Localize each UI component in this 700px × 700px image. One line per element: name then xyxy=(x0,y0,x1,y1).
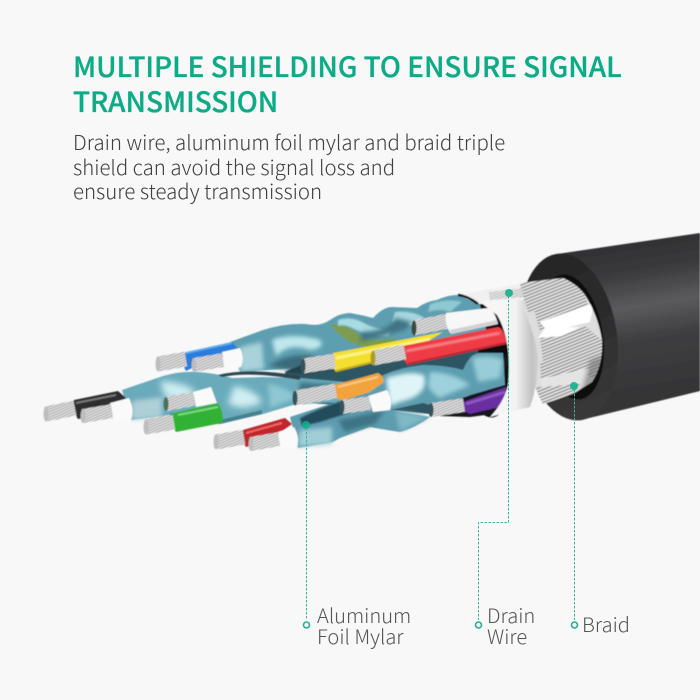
white wire xyxy=(412,308,498,336)
callout: aluminum foil mylar xyxy=(302,421,411,650)
green wire pair xyxy=(144,387,223,434)
blue wire pair xyxy=(156,342,243,372)
callout: drain wire: Drain xyxy=(487,600,535,629)
foil band xyxy=(480,300,538,417)
title: TRANSMISSION xyxy=(73,81,278,121)
description text: Drain wire, aluminum foil mylar and braid triple xyxy=(73,126,505,156)
callout: braid: Braid xyxy=(582,609,630,638)
drain wire and sleeve xyxy=(458,284,524,304)
description text: ensure steady transmission xyxy=(73,175,322,205)
description text xyxy=(73,126,505,205)
cable illustration xyxy=(44,233,700,451)
red wire xyxy=(370,327,507,366)
upper twisted foil pair xyxy=(230,295,490,374)
outer black jacket xyxy=(509,233,700,427)
black wire pair xyxy=(44,391,133,423)
white wire lower xyxy=(340,390,391,414)
title xyxy=(73,46,622,121)
purple wire xyxy=(428,387,508,417)
orange wire xyxy=(292,373,384,406)
callout: aluminum foil mylar: Aluminum xyxy=(317,600,411,629)
yellow wire xyxy=(300,332,443,374)
title: MULTIPLE SHIELDING TO ENSURE SIGNAL xyxy=(73,46,622,86)
inner fill behind foil pairs xyxy=(285,318,490,415)
lower foil pair xyxy=(290,353,508,448)
braid shield xyxy=(520,277,603,404)
callout: drain wire xyxy=(476,289,535,650)
callout: braid xyxy=(570,382,630,638)
callout: aluminum foil mylar: Foil Mylar xyxy=(317,621,404,650)
dark core opening xyxy=(449,291,519,421)
callout: drain wire: Wire xyxy=(487,621,527,650)
small red wire pair xyxy=(214,418,298,451)
middle foil pair xyxy=(122,371,350,424)
description text: shield can avoid the signal loss and xyxy=(73,151,395,181)
